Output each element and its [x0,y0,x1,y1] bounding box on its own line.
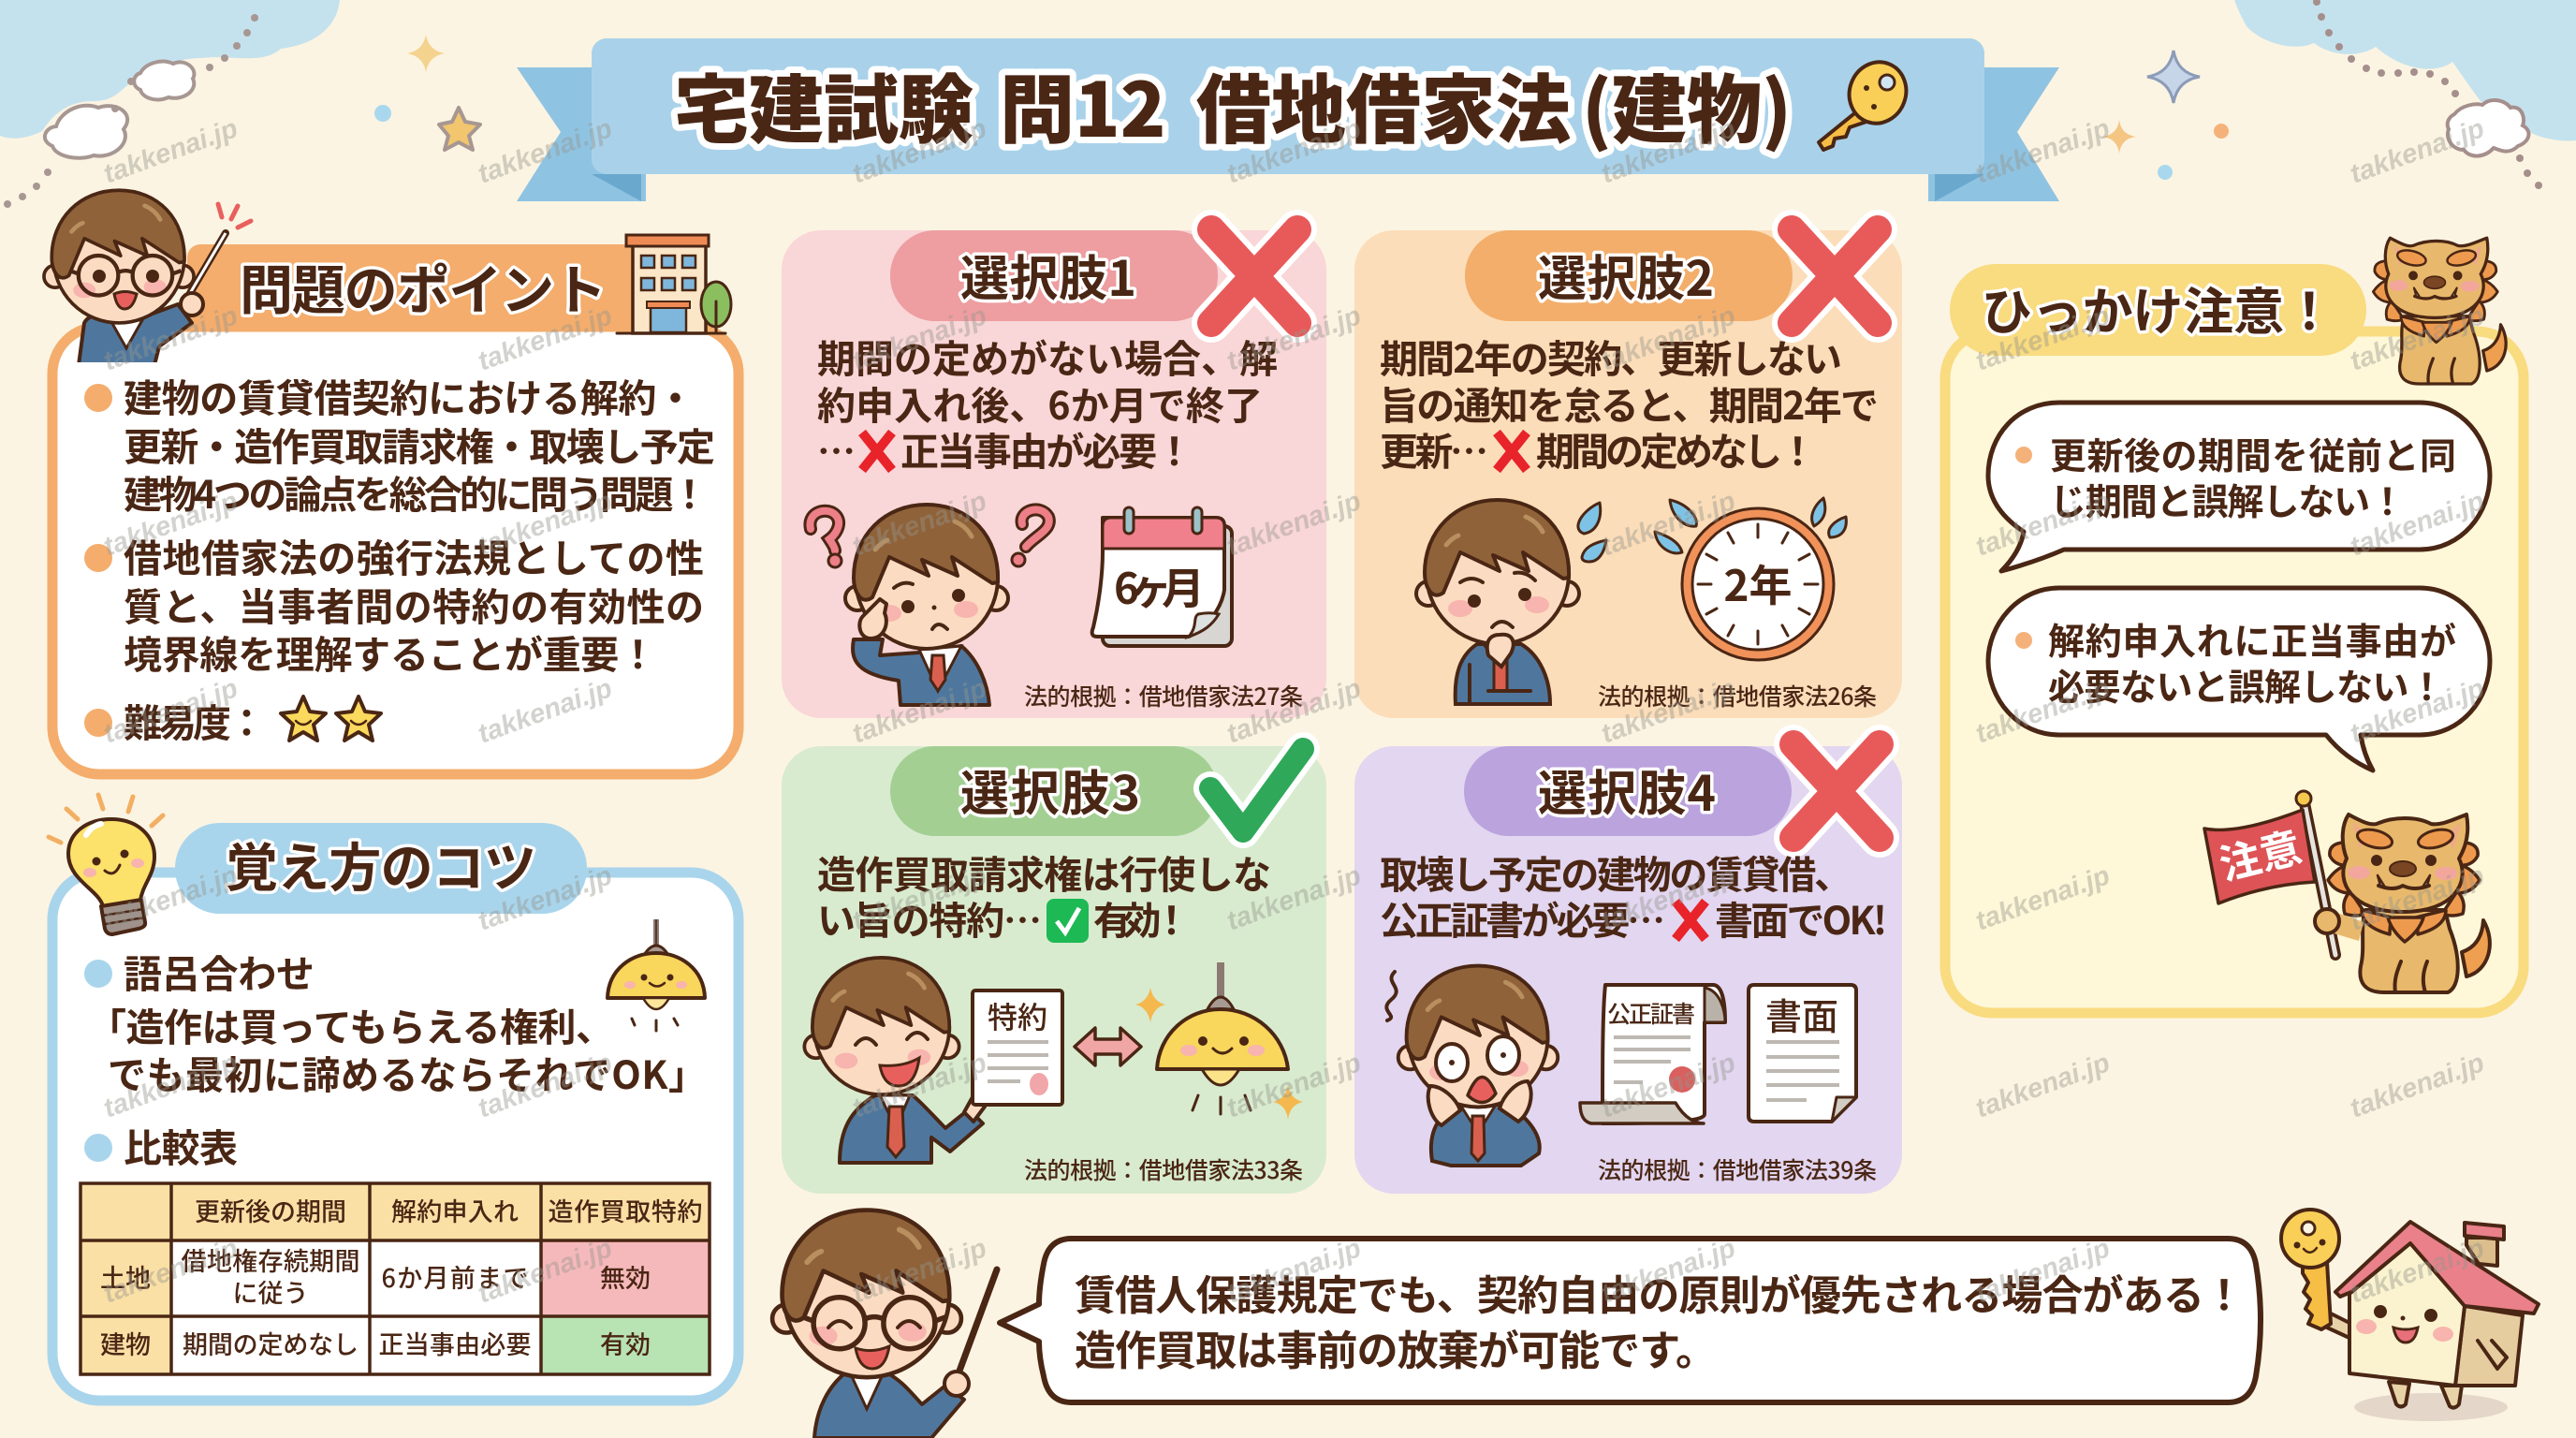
comparison table: 借地権存続期間 [182,1241,359,1278]
icon: key [1819,54,1914,150]
statement: 書面でOK! [1715,889,1887,946]
watermark: takkenai.jp [2346,860,2488,937]
watermark: takkenai.jp [848,673,990,750]
watermark: takkenai.jp [2346,113,2488,190]
watermark: takkenai.jp [2346,1233,2488,1310]
watermark: takkenai.jp [2346,673,2488,750]
watermark: takkenai.jp [1597,486,1739,563]
comparison table: 有効 [600,1325,651,1361]
watermark: takkenai.jp [474,301,616,377]
bullet points: 建物4つの論点を総合的に問う問題！ [124,463,709,520]
statement: 有効！ [1093,889,1191,946]
decoration: top-left clouds [0,0,480,208]
watermark: takkenai.jp [474,1233,616,1310]
comparison table: に従う [232,1273,309,1310]
icon: light bulb [49,795,163,934]
icon: happy student [804,958,985,1163]
bullet points: 難易度： [124,692,266,748]
panel: memory tips [52,823,739,1401]
mnemonic: 語呂合わせ [124,943,315,999]
mnemonic: 「造作は買ってもらえる権利、 [88,996,614,1052]
statement: 旨の通知を怠ると、期間2年で [1380,374,1879,431]
watermark: takkenai.jp [848,860,990,937]
callout: takeaway: 賃借人保護規定でも、契約自由の原則が優先される場合がある！ [1075,1262,2245,1322]
watermark: takkenai.jp [1222,1048,1365,1124]
panel: option 2 [1354,229,1902,718]
title text: 借地借家法 [1196,51,1571,159]
icon: clock [1682,508,1834,660]
verdict mark [1793,744,1880,838]
watermark: takkenai.jp [474,673,616,750]
title text: 宅建試験 [674,51,973,159]
icon: notarized deed scroll [1580,985,1725,1123]
icon: special agreement document: 特約 [988,994,1047,1037]
watermark: takkenai.jp [1597,1048,1739,1124]
speech bubble 2: 必要ないと誤解しない！ [2048,659,2445,712]
watermark: takkenai.jp [99,1048,242,1124]
difficulty stars [281,697,381,741]
option label [890,230,1218,321]
statement: 期間の定めがない場合、解 [817,328,1278,384]
heading: ひっかけ注意！ [1982,271,2334,345]
watermark: takkenai.jp [848,1048,990,1124]
watermark: takkenai.jp [1222,113,1365,190]
icon: pendant lamp [607,919,705,1031]
statement: い旨の特約… [817,889,1042,946]
icon: clock: 2年 [1723,552,1793,614]
watermark: takkenai.jp [1222,1233,1365,1310]
icon: calendar [1092,507,1232,646]
statement [1380,844,1887,946]
speech bubble 2: 解約申入れに正当事由が [2048,613,2456,666]
panel: option 3 [782,746,1326,1194]
comparison table: 正当事由必要 [378,1325,532,1361]
heading tab [175,823,587,914]
comparison table: 土地 [100,1258,151,1295]
speech bubble 1: 更新後の期間を従前と同 [2050,428,2456,480]
icon: confused student [845,505,1008,705]
bullet points [84,367,715,748]
watermark: takkenai.jp [1971,486,2114,563]
mnemonic: でも最初に諦めるならそれでOK」 [108,1044,707,1100]
option label: 選択肢1 [960,240,1136,310]
watermark: takkenai.jp [1971,301,2114,377]
statement: 期間の定めなし！ [1536,420,1817,477]
watermark: takkenai.jp [474,113,616,190]
icon: teacher [44,190,251,365]
comparison heading: 比較表 [124,1117,238,1173]
watermark: takkenai.jp [1597,860,1739,937]
icon: building [617,235,731,333]
bullet points: 建物の賃貸借契約における解約・ [124,367,695,423]
comparison table: 建物 [100,1325,151,1361]
panel: option 4 [1354,744,1902,1194]
watermark: takkenai.jp [2346,1048,2488,1124]
icon: notarized deed scroll: 公正証書 [1607,996,1695,1030]
statement [817,328,1278,477]
watermark: takkenai.jp [1222,486,1365,563]
watermark: takkenai.jp [1971,1233,2114,1310]
speech bubble 1: じ期間と誤解しない！ [2050,474,2406,526]
panel: problem point [52,244,739,774]
legal basis: 法的根拠：借地借家法33条 [1024,1152,1303,1186]
statement: … [817,420,856,477]
watermark: takkenai.jp [1971,1048,2114,1124]
watermark: takkenai.jp [1971,673,2114,750]
icon: calendar: 6ヶ月 [1114,555,1205,617]
icon: worried student [1416,500,1579,704]
icon: sweat drops [1578,498,1846,562]
statement [817,844,1271,946]
statement: 造作買取請求権は行使しな [817,844,1271,900]
watermark: takkenai.jp [1222,673,1365,750]
watermark: takkenai.jp [99,301,242,377]
option label [1464,746,1792,836]
statement: 期間2年の契約、更新しない [1380,328,1842,384]
watermark: takkenai.jp [1597,1233,1739,1310]
heading: 問題のポイント [240,248,607,325]
statement: 約申入れ後、6か月で終了 [817,374,1263,431]
mascot: shisa with flag: 注意 [2213,814,2306,892]
speech bubble 1 [1988,403,2490,571]
title banner [517,38,2059,201]
comparison table: 期間の定めなし [183,1325,359,1361]
icon: question marks [810,509,1049,567]
statement [1380,328,1879,477]
watermark: takkenai.jp [848,1233,990,1310]
title text: (建物) [1582,51,1792,159]
watermark: takkenai.jp [2346,486,2488,563]
bullet points: 借地借家法の強行法規としての性 [124,527,704,583]
icon: special agreement document [973,990,1062,1105]
icon: shocked student [1386,966,1558,1166]
comparison table [80,1183,710,1374]
watermark: takkenai.jp [848,486,990,563]
verdict mark [1792,229,1878,323]
watermark: takkenai.jp [1971,860,2114,937]
watermark: takkenai.jp [2346,301,2488,377]
icon: smiling lamp [1135,962,1303,1120]
watermark: takkenai.jp [1597,301,1739,377]
icon: written paper: 書面 [1765,989,1838,1041]
watermark: takkenai.jp [1222,860,1365,937]
statement: 更新… [1380,420,1488,477]
bullet points: 境界線を理解することが重要！ [124,624,657,680]
legal basis: 法的根拠：借地借家法39条 [1598,1152,1877,1186]
statement: 正当事由が必要！ [900,420,1193,477]
mascot: shisa top [2373,238,2506,384]
option label [1465,230,1793,321]
mascot: shisa with flag [2204,791,2490,992]
legal basis: 法的根拠：借地借家法26条 [1598,679,1877,712]
icon: house mascot with key [2281,1210,2539,1421]
callout: takeaway: 造作買取は事前の放棄が可能です。 [1075,1317,1717,1377]
comparison table: 解約申入れ [391,1192,519,1228]
watermark: takkenai.jp [474,486,616,563]
statement: 取壊し予定の建物の賃貸借、 [1380,844,1852,900]
watermark: takkenai.jp [99,673,242,750]
option label: 選択肢3 [960,755,1140,825]
panel: trap warning [1945,238,2524,1013]
watermark: takkenai.jp [99,486,242,563]
watermark: takkenai.jp [474,860,616,937]
watermark: takkenai.jp [1597,113,1739,190]
option label [890,746,1218,836]
comparison table: 更新後の期間 [195,1192,346,1228]
watermark: takkenai.jp [99,113,242,190]
option label: 選択肢4 [1538,755,1716,825]
comparison table: 6か月前まで [382,1258,528,1295]
watermark: takkenai.jp [1971,113,2114,190]
callout: takeaway [1000,1239,2261,1402]
option label: 選択肢2 [1538,240,1714,310]
title text: 問12 [1000,51,1165,159]
panel: option 1 [782,229,1326,718]
watermark: takkenai.jp [848,301,990,377]
comparison table: 造作買取特約 [549,1192,702,1228]
bullet points: 質と、当事者間の特約の有効性の [124,576,704,632]
watermark: takkenai.jp [1222,301,1365,377]
watermark: takkenai.jp [474,1048,616,1124]
mnemonic [84,943,707,1100]
icon: double arrow [1075,1028,1141,1065]
icon: bottom teacher [772,1211,997,1438]
heading: 覚え方のコツ [226,827,536,902]
legal basis: 法的根拠：借地借家法27条 [1024,679,1303,712]
icon: written paper [1749,985,1856,1122]
statement: 公正証書が必要… [1380,889,1665,946]
heading tab [187,244,637,338]
comparison table: 無効 [600,1258,651,1295]
watermark: takkenai.jp [1597,673,1739,750]
decoration: top-right clouds [2102,0,2576,189]
verdict mark [1211,229,1297,323]
heading tab [1950,264,2366,356]
watermark: takkenai.jp [99,1233,242,1310]
watermark: takkenai.jp [848,113,990,190]
speech bubble 2 [1988,588,2490,770]
verdict mark [1210,749,1303,831]
watermark: takkenai.jp [99,860,242,937]
bullet points: 更新・造作買取請求権・取壊し予定 [124,416,715,472]
